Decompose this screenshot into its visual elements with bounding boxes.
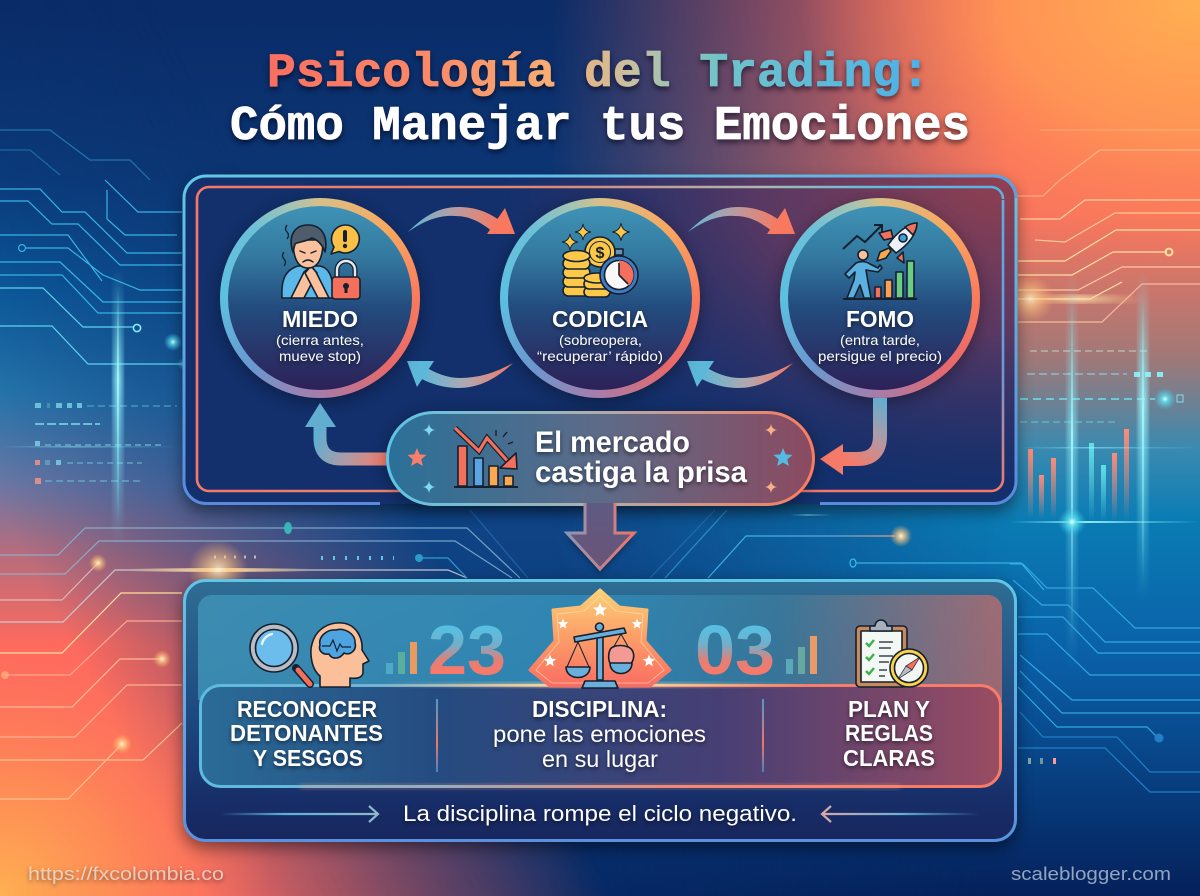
label: fomo: FOMO: [846, 306, 914, 332]
text: plan y reglas claras: [843, 696, 935, 771]
glow streaks: left: [0, 270, 180, 545]
text: disciplina: pone las emociones: [493, 721, 706, 747]
icon: stars and sparkles: [407, 424, 793, 493]
label: el mercado castiga la prisa: [535, 426, 747, 489]
label: codicia: [537, 306, 663, 364]
icon: badge with scale: [530, 590, 670, 688]
text: la disciplina rompe el ciclo negativo: La disciplina rompe el ciclo negativo.: [403, 801, 797, 826]
icon: magnifier: [250, 624, 310, 684]
arrow: codicia to miedo: [407, 361, 513, 388]
text: reconocer detonantes y sesgos: Y SESGOS: [253, 745, 363, 771]
number: 23: 23: [428, 611, 506, 689]
label: fomo: (entra tarde,: [840, 332, 920, 348]
label: miedo: [276, 306, 364, 364]
lower box: three columns: [200, 683, 1000, 789]
pill: el mercado castiga la prisa: [386, 412, 815, 508]
circuit lines: center gap: [130, 510, 1044, 600]
label: codicia: “recuperar’ rápido): [537, 348, 663, 364]
text: plan y reglas claras: PLAN Y: [848, 696, 930, 722]
icon: clipboard with compass: [856, 620, 928, 687]
footer: source url: https://fxcolombia.co: [28, 864, 224, 884]
text: plan y reglas claras: CLARAS: [843, 745, 935, 771]
circuit lines: top right: [1006, 130, 1200, 323]
label: el mercado castiga la prisa: castiga la prisa: [535, 456, 747, 489]
arrow: left to center: [220, 806, 378, 822]
footer: credit: scaleblogger.com: [1011, 864, 1171, 884]
label: fomo: [818, 306, 942, 364]
arrow: miedo to codicia: [408, 207, 515, 234]
label: fomo: persigue el precio): [818, 348, 942, 364]
arrow: right to center: [822, 806, 980, 822]
icon: coins and stopwatch: [562, 223, 638, 297]
icon: falling chart: [454, 428, 518, 487]
text: disciplina: en su lugar: [542, 746, 658, 772]
icon: worried person with alert and padlock: [282, 225, 360, 299]
title: Psicología del Trading:: [267, 47, 930, 101]
text: disciplina: DISCIPLINA:: [532, 696, 667, 722]
text: reconocer detonantes y sesgos: RECONOCER: [237, 696, 377, 722]
text: reconocer detonantes y sesgos: DETONANTES: [230, 720, 383, 746]
circle: fomo: [780, 198, 980, 402]
label: el mercado castiga la prisa: El mercado: [535, 426, 690, 459]
arrow: down to discipline panel: [567, 503, 634, 574]
label: codicia: CODICIA: [552, 306, 648, 332]
icon: trader chasing rocket: [843, 223, 917, 299]
circuit lines: bottom left: [0, 528, 520, 799]
number: 03: 03: [695, 611, 775, 689]
label: miedo: (cierra antes,: [276, 332, 364, 348]
circuit lines: top left: [0, 130, 189, 370]
circle: codicia: [500, 198, 700, 402]
label: miedo: mueve stop): [279, 348, 361, 364]
arrow: market to miedo: [305, 403, 388, 459]
title: Cómo Manejar tus Emociones: [230, 100, 970, 154]
text: reconocer detonantes y sesgos: [230, 696, 383, 771]
chart: mini bars left: [386, 642, 417, 674]
icon: coins and stopwatch: $: [596, 245, 605, 262]
data dashes: left: [35, 403, 177, 484]
title: [230, 47, 970, 154]
arrow: fomo to codicia: [687, 361, 793, 388]
chart: mini bars right: [786, 636, 817, 674]
data dashes and bar chart: right: [1010, 270, 1200, 670]
arrow: fomo to market: [820, 398, 880, 475]
panel: emotional cycle: [183, 176, 1017, 512]
text: disciplina: [493, 696, 706, 772]
label: miedo: MIEDO: [282, 306, 358, 332]
icon: head with brain: [311, 623, 369, 687]
label: codicia: (sobreopera,: [559, 332, 642, 348]
text: plan y reglas claras: REGLAS: [845, 720, 933, 746]
panel: discipline: [183, 580, 1017, 848]
circuit lines: bottom right: [1010, 564, 1200, 792]
circle: miedo: [220, 198, 420, 402]
arrow: codicia to fomo: [688, 207, 795, 234]
